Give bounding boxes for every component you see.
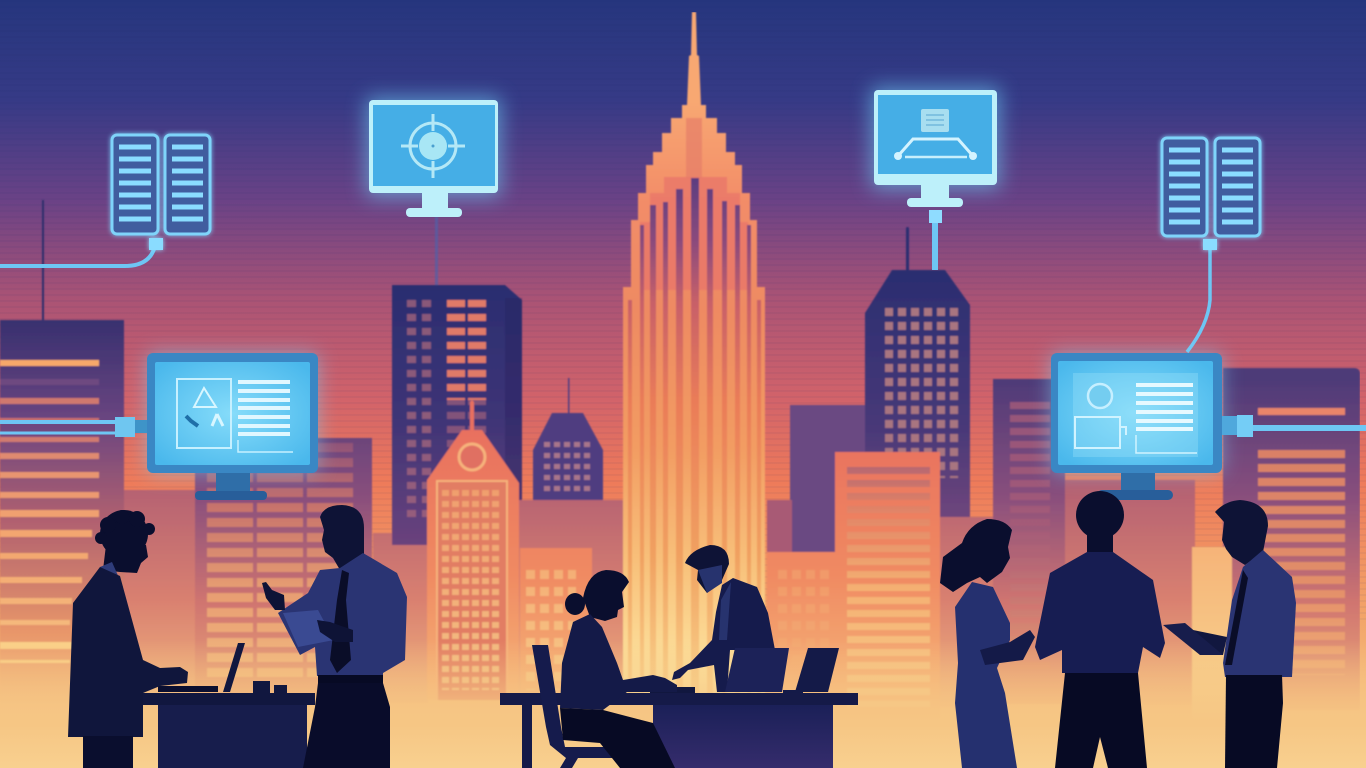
building: rose block at tower base: [767, 500, 792, 560]
building: central skyscraper: [623, 12, 765, 700]
building: far left mast: [42, 200, 44, 325]
building: rose block under left monitor: [124, 490, 199, 710]
building: orange gabled tower: [427, 400, 519, 700]
person: man seen from behind: [1035, 491, 1165, 768]
icon: monitor with network diagram: [871, 87, 1000, 223]
icon: monitor right with document: [1051, 353, 1253, 500]
building: pale block far right: [1192, 547, 1232, 727]
building: low block beside gabled tower: [520, 548, 592, 681]
building: rose block beside navy tower: [373, 533, 428, 703]
icon: monitor with target: [366, 97, 501, 217]
icon: server rack right: [1162, 138, 1260, 250]
building: rose block right of striped block: [940, 517, 996, 707]
building: dome behind: [533, 378, 603, 500]
person: man leaning over centre desk: [672, 545, 839, 693]
building: purple block left of navy tower: [790, 405, 870, 555]
cables: [0, 223, 1366, 433]
tower window slits: [628, 178, 761, 700]
icon: server rack left: [112, 135, 210, 250]
desk: centre with laptops: [500, 687, 858, 768]
building: low block by centre: [766, 550, 836, 656]
building: lower left block: [195, 438, 372, 698]
building: rose block middle right: [1065, 480, 1195, 705]
building: far right tower: [1223, 368, 1360, 710]
building: orange striped block: [834, 450, 942, 678]
far left tower window bars: [0, 360, 99, 663]
building: narrow block right: [993, 379, 1065, 704]
icon: monitor left with document: [115, 353, 318, 500]
building: right navy tower: [865, 227, 970, 550]
person: woman with long hair: [940, 519, 1035, 768]
person: man with tablet on right: [1163, 500, 1296, 768]
building: block behind dome: [519, 500, 624, 700]
person: man with tie and tablet: [262, 505, 407, 768]
person: man in jacket at left desk: [68, 510, 188, 768]
building: far left tower: [0, 320, 124, 710]
foreground haze: [0, 640, 1366, 768]
building: centre left tower: [392, 217, 522, 545]
person: seated woman with ponytail: [532, 570, 677, 768]
desk: left with laptop: [143, 643, 315, 768]
